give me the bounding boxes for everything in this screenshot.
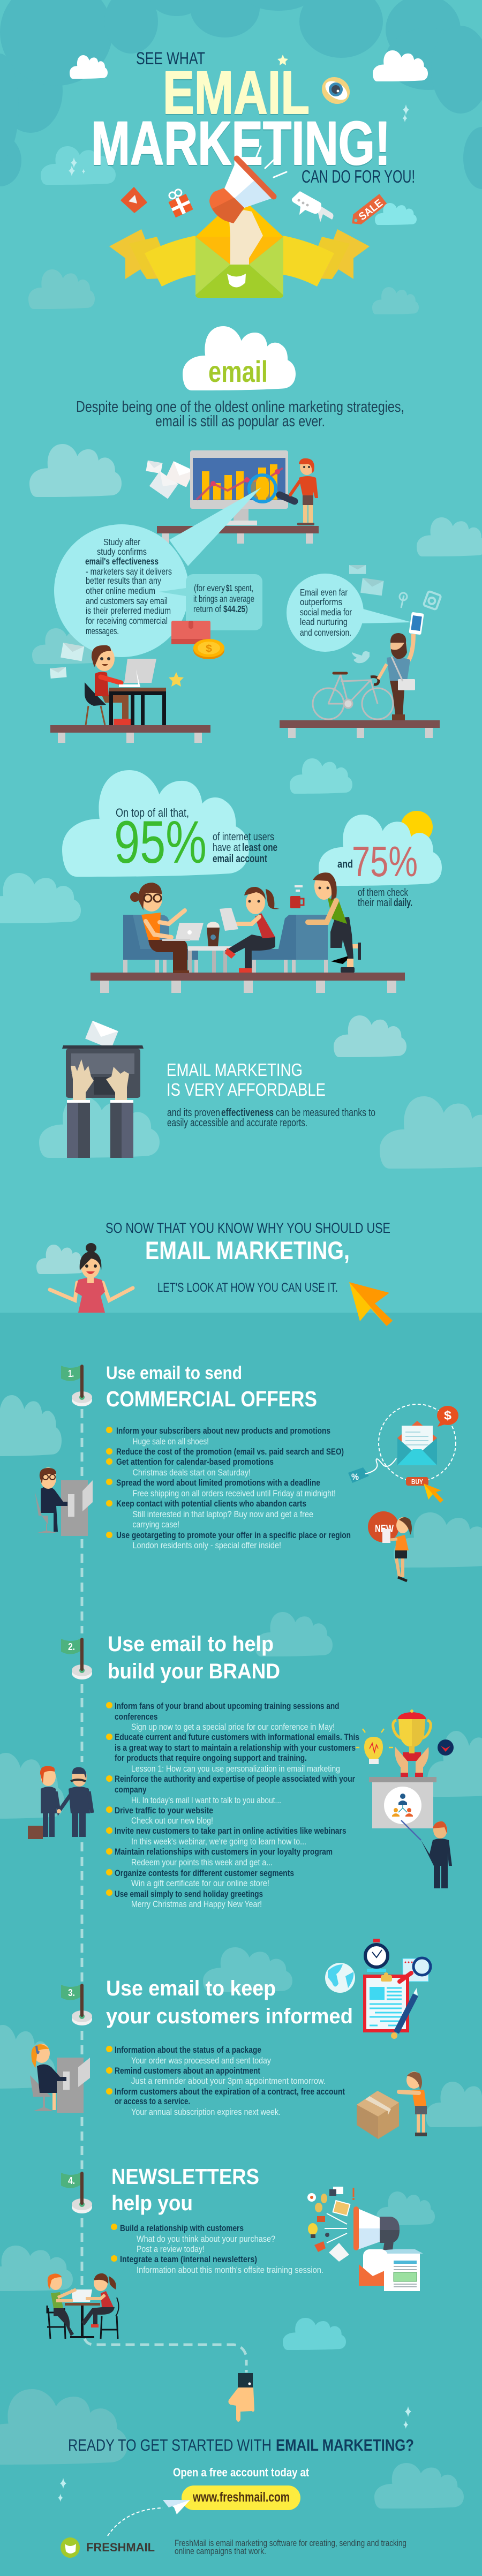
section 1 list: Use geotargeting to promote your offer in a specific place or region bbox=[116, 1530, 351, 1540]
whiteboard with org chart bbox=[369, 1777, 436, 1828]
icon: percent tag: % bbox=[351, 1472, 359, 1482]
title: email: EMAIL bbox=[163, 59, 310, 126]
icon: gift bbox=[165, 187, 193, 217]
background lower bbox=[0, 1313, 482, 2576]
logo: freshmail: FRESHMAIL bbox=[86, 2541, 155, 2554]
button: buy: BUY bbox=[411, 1478, 423, 1486]
cloud bbox=[32, 628, 99, 664]
icon: dollar bubble: $ bbox=[444, 1408, 451, 1422]
bubble text: study: study confirms bbox=[97, 546, 147, 557]
stat: 75 percent bbox=[337, 838, 418, 909]
cloud: 75 percent bbox=[319, 815, 442, 886]
cloud bbox=[417, 517, 482, 556]
shelf: cafe bbox=[91, 973, 405, 993]
icons: envelopes bbox=[349, 565, 384, 596]
icon: newsletter bbox=[359, 2249, 423, 2291]
section 2 list: for products that require ongoing support and training. bbox=[115, 1753, 307, 1763]
person: receptionist bbox=[30, 2044, 90, 2114]
cloud bbox=[376, 2191, 435, 2225]
section 2 heading: Use email to help bbox=[108, 1632, 274, 1656]
section 3 marker bbox=[61, 1984, 92, 2025]
stat: 95 percent: 95% bbox=[114, 809, 207, 876]
bubble text: study: Study after bbox=[103, 537, 140, 547]
bubble text: study: email's effectiveness bbox=[85, 556, 159, 567]
icon: document bbox=[363, 1972, 409, 2032]
heading: affordable bbox=[167, 1060, 326, 1099]
icon: coin bbox=[193, 639, 224, 659]
cloud bbox=[372, 287, 419, 314]
bubble text: social media: Email even far bbox=[300, 587, 348, 598]
sparkles bbox=[58, 2406, 411, 2502]
section 2 marker: 2. bbox=[68, 1641, 75, 1652]
cloud white right bbox=[373, 50, 428, 81]
cloud bbox=[36, 1245, 85, 1274]
icon: pointing hand bbox=[228, 2373, 254, 2422]
icon: lightbulb bbox=[356, 1729, 393, 1764]
dashed arc bbox=[108, 2508, 163, 2536]
section 4 list: What do you think about your purchase? bbox=[137, 2234, 275, 2244]
section 2 list: Organize contests for different customer segments bbox=[115, 1868, 294, 1878]
envelope on laptop bbox=[85, 1021, 118, 1049]
footer description: online campaigns that work. bbox=[175, 2546, 266, 2556]
stat: 75 percent: of them check bbox=[358, 887, 409, 899]
text: affordable: effectiveness bbox=[221, 1107, 274, 1119]
shelf: desk bbox=[50, 725, 210, 743]
section 2 list: Redeem your points this week and get a... bbox=[131, 1857, 273, 1867]
section 2 bullets bbox=[106, 1702, 112, 1896]
section 3 heading: Use email to keep bbox=[106, 1977, 276, 2000]
people: handshake bbox=[28, 1766, 92, 1839]
person: woman with tablet bbox=[382, 1517, 412, 1581]
megaphone bbox=[209, 146, 287, 223]
section 4 list: Information about this month's offsite training session. bbox=[137, 2265, 323, 2275]
transition heading: SO NOW THAT YOU KNOW WHY YOU SHOULD USE bbox=[106, 1220, 390, 1236]
cloud bbox=[334, 1015, 406, 1057]
icon: magnifier bbox=[400, 1958, 431, 1982]
cloud bbox=[427, 1731, 482, 1797]
heading: affordable: IS VERY AFFORDABLE bbox=[167, 1080, 326, 1099]
section 1 list: London residents only - special offer inside! bbox=[133, 1540, 281, 1550]
title: can do for you: CAN DO FOR YOU! bbox=[302, 167, 415, 186]
call to action text: Open a free account today at bbox=[173, 2466, 310, 2479]
cloud bbox=[283, 2318, 346, 2350]
transition heading bbox=[106, 1220, 390, 1295]
section 4 list: Post a review today! bbox=[137, 2244, 205, 2254]
section 3 heading: your customers informed bbox=[106, 2005, 353, 2028]
section 3 list: Inform customers about the expiration of a contract, free account bbox=[115, 2087, 345, 2097]
section 1 heading: COMMERCIAL OFFERS bbox=[106, 1387, 317, 1411]
icon: pencil bbox=[391, 1988, 418, 2039]
section 2 list: Invite new customers to take part in online activities like webinars bbox=[115, 1826, 346, 1836]
person: woman with box bbox=[399, 2072, 427, 2136]
cloud bbox=[203, 1947, 292, 1992]
person: woman with tablet bbox=[220, 887, 280, 973]
stat: 95 percent: On top of all that, bbox=[116, 806, 189, 819]
icon: paper plane bbox=[163, 2500, 190, 2514]
icon: dollar bubble bbox=[437, 1406, 458, 1427]
arrow: cursor bbox=[349, 1282, 393, 1326]
cloud bbox=[41, 146, 116, 185]
icon: cardboard box bbox=[357, 2091, 399, 2139]
section 2 list: conferences bbox=[115, 1712, 157, 1722]
section 3 heading bbox=[106, 1977, 353, 2028]
section 2 list: company bbox=[115, 1784, 147, 1795]
icon: coin: $ bbox=[206, 643, 212, 654]
word: email: email bbox=[208, 355, 268, 388]
person: man at workstation bbox=[35, 1467, 93, 1536]
person: standing woman with mug bbox=[290, 872, 361, 973]
sparkles top right bbox=[403, 104, 409, 122]
line chart bbox=[197, 468, 283, 500]
section 1 list: Huge sale on all shoes! bbox=[133, 1436, 209, 1447]
cloud bbox=[375, 203, 417, 225]
magnifier bbox=[249, 475, 295, 502]
icon: star bbox=[277, 55, 288, 65]
person: woman with glasses bbox=[130, 883, 189, 973]
section 2 list: is a great way to start to maintain a relationship with your customers bbox=[115, 1743, 356, 1753]
stat: 75 percent: their mail bbox=[358, 897, 392, 909]
title: marketing: MARKETING! bbox=[91, 109, 390, 178]
section 2 list: Win a gift certificate for our online store! bbox=[131, 1878, 269, 1888]
bar chart bbox=[202, 464, 277, 500]
section 4 list: Integrate a team (internal newsletters) bbox=[120, 2254, 257, 2264]
cloud bbox=[374, 2463, 464, 2509]
bubble text: study: for receiving commercial bbox=[86, 615, 168, 626]
bubble text: study: is their preferred medium bbox=[86, 605, 171, 616]
stat: 95 percent: have at bbox=[213, 842, 240, 854]
stat: 75 percent: and bbox=[337, 858, 353, 870]
icon: pinterest bbox=[400, 593, 407, 608]
cloud bbox=[0, 2025, 55, 2089]
desk and computer bbox=[109, 659, 166, 725]
section 2 marker bbox=[61, 1638, 92, 1679]
section 4 heading: NEWSLETTERS bbox=[111, 2164, 259, 2189]
transition heading: LET'S LOOK AT HOW YOU CAN USE IT. bbox=[157, 1281, 338, 1295]
icon: eye bbox=[317, 72, 355, 109]
logo: freshmail bbox=[61, 2537, 155, 2558]
person: man with phone bbox=[378, 633, 415, 720]
icon: trophy bbox=[393, 1709, 431, 1777]
section 4 marker bbox=[61, 2172, 92, 2213]
section 1 marker: 1. bbox=[68, 1368, 74, 1379]
icon: instagram bbox=[424, 591, 441, 610]
section 3 list: Just a reminder about your 3pm appointment tomorrow. bbox=[131, 2076, 326, 2086]
section 1 marker bbox=[61, 1365, 92, 1406]
bubble text: social media: lead nurturing bbox=[300, 616, 348, 627]
badge: new bbox=[368, 1511, 399, 1542]
bubble text: social media: outperforms bbox=[300, 597, 342, 607]
text: affordable: easily accessible and accurate reports. bbox=[167, 1117, 307, 1129]
cloud bbox=[426, 2082, 482, 2127]
small callout box: $1 bbox=[226, 583, 232, 593]
intro text: Despite being one of the oldest online marketing strategies, bbox=[76, 398, 404, 416]
section 2 list: Merry Christmas and Happy New Year! bbox=[131, 1899, 262, 1909]
text: affordable bbox=[167, 1107, 375, 1129]
envelope bbox=[195, 195, 283, 298]
section 3 bullets bbox=[106, 2046, 112, 2095]
cloud bbox=[0, 1753, 64, 1819]
icon: sun bbox=[401, 811, 433, 843]
icons: newsletter content bbox=[307, 2187, 355, 2262]
icon: navy badge bbox=[438, 1739, 454, 1756]
section 2 list: Lesson 1: How can you use personalization in email marketing bbox=[131, 1764, 340, 1774]
section 4 heading: help you bbox=[111, 2191, 193, 2215]
section 1 list: Get attention for calendar-based promotions bbox=[116, 1457, 274, 1467]
intro text: email is still as popular as ever. bbox=[155, 413, 325, 430]
icon: envelopes flying bbox=[146, 461, 194, 499]
dash below bbox=[245, 2370, 247, 2372]
bicycle bbox=[313, 673, 393, 719]
section 1 heading bbox=[106, 1363, 317, 1411]
bubble text: social media: social media for bbox=[300, 607, 352, 617]
bubble text: social media: and conversion. bbox=[300, 627, 351, 638]
section 4 list: Build a relationship with customers bbox=[120, 2223, 244, 2233]
section 1 list: Inform your subscribers about new products and promotions bbox=[116, 1426, 330, 1436]
small callout box: it brings an average bbox=[193, 593, 254, 604]
person: woman bbox=[49, 1243, 134, 1313]
icon: sale tag bbox=[348, 194, 388, 229]
footer description bbox=[175, 2538, 406, 2556]
title: see what: SEE WHAT bbox=[136, 49, 205, 68]
person: man with magnifier bbox=[290, 458, 318, 525]
person: presenter bbox=[401, 1820, 452, 1888]
text: affordable: can be measured thanks to bbox=[276, 1107, 375, 1119]
cloud bbox=[0, 1395, 62, 1456]
icon: cursor bbox=[424, 1483, 443, 1503]
cloud bbox=[380, 1096, 482, 1169]
section 2 heading bbox=[108, 1632, 280, 1683]
section 4 marker: 4. bbox=[68, 2175, 75, 2186]
bubble text: study: other online medium bbox=[86, 585, 155, 596]
cloud bbox=[255, 1612, 333, 1656]
icons: envelopes bbox=[50, 643, 84, 679]
cloud bbox=[290, 758, 352, 794]
small callout box: return of bbox=[193, 604, 221, 614]
icon: big megaphone bbox=[353, 2206, 400, 2255]
small callout box: ) bbox=[245, 604, 248, 614]
cloud: 95 percent bbox=[62, 770, 249, 877]
icon: play bbox=[122, 188, 146, 212]
person: man at desk bbox=[85, 645, 131, 725]
section 2 heading: build your BRAND bbox=[108, 1660, 280, 1683]
section 1 heading: Use email to send bbox=[106, 1363, 242, 1383]
section 1 list: Spread the word about limited promotions with a deadline bbox=[116, 1478, 320, 1488]
bubble text: study: messages. bbox=[86, 626, 119, 636]
transition heading: EMAIL MARKETING, bbox=[145, 1236, 350, 1264]
section 2 list: Maintain relationships with customers in your loyalty program bbox=[115, 1847, 333, 1857]
section 1 list: Keep contact with potential clients who abandon carts bbox=[116, 1498, 306, 1509]
section 2 list: Check out our new blog! bbox=[131, 1816, 213, 1826]
dashed path bbox=[80, 1409, 84, 2285]
bubble text: study bbox=[85, 537, 172, 636]
section 1 list: Free shipping on all orders received until Friday at midnight! bbox=[133, 1488, 336, 1498]
section 2 list bbox=[115, 1701, 359, 1909]
button: url bbox=[182, 2485, 300, 2510]
section 2 list: Use email simply to send holiday greetings bbox=[115, 1889, 263, 1899]
section 3 list: Remind customers about an appointment bbox=[115, 2066, 260, 2076]
hero: ribbon and envelope with megaphone bbox=[109, 146, 370, 298]
small callout box: spent, bbox=[235, 583, 253, 593]
section 2 list: Reinforce the authority and expertise of people associated with your bbox=[115, 1774, 355, 1784]
cloud white left bbox=[70, 55, 108, 79]
section 1 list: Reduce the cost of the promotion (email vs. paid search and SEO) bbox=[116, 1447, 344, 1457]
small callout box bbox=[159, 574, 262, 630]
section 1 list bbox=[116, 1426, 351, 1550]
section 3 list: or access to a service. bbox=[115, 2096, 190, 2106]
section 2 list: Drive traffic to your website bbox=[115, 1805, 213, 1816]
section 1 list: Still interested in that laptop? Buy now and get a free bbox=[133, 1509, 313, 1519]
call to action heading: EMAIL MARKETING? bbox=[276, 2436, 414, 2454]
speech bubble: social media bbox=[287, 574, 412, 652]
dark scalloped clouds at top bbox=[0, 0, 482, 189]
cloud bbox=[39, 1096, 160, 1158]
section 2 list: Inform fans of your brand about upcoming training sessions and bbox=[115, 1701, 340, 1711]
section 3 list: Your annual subscription expires next week. bbox=[131, 2107, 281, 2117]
stat: 95 percent: least one bbox=[242, 842, 277, 854]
dashed path bottom bbox=[85, 2339, 246, 2366]
icon: phone bbox=[409, 612, 424, 635]
intro text bbox=[76, 398, 404, 430]
cloud: email badge bbox=[183, 326, 296, 390]
stat: 95 percent: email account bbox=[213, 853, 267, 865]
speech bubble: study bbox=[54, 487, 261, 657]
icon: twitter bbox=[352, 651, 370, 663]
section 2 list: Educate current and future customers with informational emails. This bbox=[115, 1732, 359, 1742]
icon: star bbox=[169, 672, 184, 687]
sofa left bbox=[123, 915, 198, 973]
small callout box: $44.25 bbox=[223, 604, 245, 614]
icon: percent tag bbox=[348, 1458, 396, 1483]
footer description: FreshMail is email marketing software for creating, sending and tracking bbox=[175, 2538, 406, 2548]
icon: dashed circle with envelope bbox=[379, 1404, 456, 1481]
cloud bbox=[0, 2389, 127, 2465]
cloud bbox=[28, 269, 95, 309]
icon: clock bbox=[365, 1939, 388, 1972]
section 4 bullets bbox=[111, 2224, 117, 2262]
people: couple at table bbox=[47, 2273, 119, 2339]
stat: 95 percent: of internet users bbox=[213, 831, 274, 843]
section 4 heading bbox=[111, 2164, 259, 2215]
bubble text: study: better results than any bbox=[86, 575, 161, 586]
monitor with chart bbox=[190, 450, 295, 525]
table with coffee bbox=[188, 922, 238, 973]
call to action heading: READY TO GET STARTED WITH bbox=[68, 2436, 272, 2454]
cloud bbox=[394, 1512, 482, 1568]
icon: browser window bbox=[403, 1959, 428, 1982]
text: affordable: and its proven bbox=[167, 1107, 220, 1119]
icon: laptop from above with hands bbox=[62, 1021, 144, 1158]
bubble text: study: - marketers say it delivers bbox=[86, 566, 172, 577]
background upper bbox=[0, 0, 482, 1313]
button: buy bbox=[406, 1477, 428, 1486]
laptop bbox=[162, 923, 204, 941]
bubble text: study: and customers say email bbox=[86, 596, 168, 606]
sparkles bbox=[69, 157, 85, 176]
section 4 list bbox=[120, 2223, 323, 2275]
stat: 75 percent: daily. bbox=[394, 897, 412, 909]
badge: new: NEW bbox=[375, 1523, 394, 1535]
button: url: www.freshmail.com bbox=[192, 2490, 290, 2505]
shelf: monitor bbox=[157, 526, 319, 544]
shelf: bicycle bbox=[280, 720, 440, 738]
icon: chat bubbles bbox=[292, 191, 333, 222]
section 3 list: Information about the status of a package bbox=[115, 2045, 261, 2055]
sofa right bbox=[252, 915, 328, 973]
section 2 list: Hi. In today's mail I want to talk to you about... bbox=[131, 1795, 281, 1805]
section 1 list: carrying case! bbox=[133, 1519, 179, 1530]
section 2 list: Sign up now to get a special price for our conference in May! bbox=[131, 1722, 335, 1732]
section 1 list: Christmas deals start on Saturday! bbox=[133, 1467, 251, 1478]
icon: sale tag: SALE bbox=[357, 197, 385, 223]
icon: wallet bbox=[171, 621, 210, 644]
stat: 75 percent: 75% bbox=[352, 838, 418, 885]
section 3 marker: 3. bbox=[68, 1987, 75, 1998]
section 3 list bbox=[115, 2045, 345, 2117]
icon: globe bbox=[325, 1963, 355, 1993]
bubble text: social media bbox=[300, 587, 352, 638]
cloud bbox=[29, 444, 122, 497]
cloud bbox=[0, 2246, 73, 2291]
section 1 bullets bbox=[106, 1427, 112, 1538]
section 3 list: Your order was processed and sent today bbox=[131, 2055, 271, 2066]
section 2 list: In this week's webinar, we're going to learn how to... bbox=[131, 1836, 306, 1847]
small callout box: (for every bbox=[194, 583, 225, 593]
heading: affordable: EMAIL MARKETING bbox=[167, 1060, 303, 1080]
cloud bbox=[0, 873, 81, 923]
